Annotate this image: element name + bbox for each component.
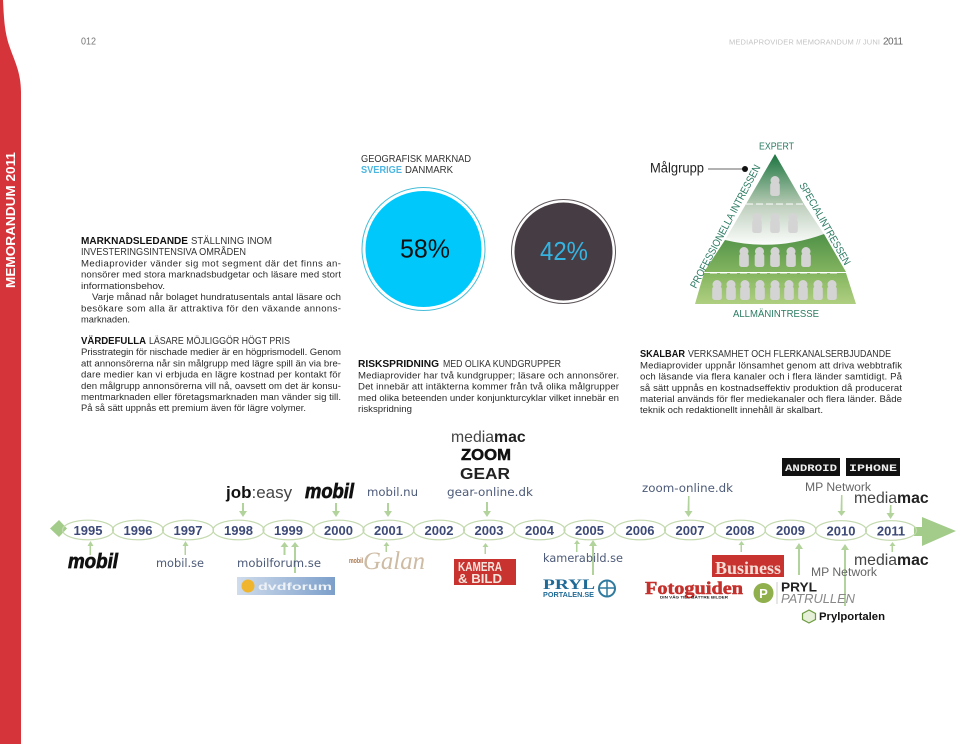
text block: värdefulla: VÄRDEFULLA [81, 334, 146, 347]
geographic market heading: DANMARK [405, 164, 453, 176]
year labels: 2007 [676, 523, 704, 538]
year labels: 1998 [224, 523, 253, 538]
text block: skalbar: material används för fler mediekanaler och flera länder. Både [640, 394, 902, 405]
year labels: 1996 [124, 523, 152, 538]
logo: mediamac top: mediamac [451, 429, 526, 446]
year labels: 2003 [475, 523, 503, 538]
circle: 58 percent Sverige: 58% [400, 234, 450, 264]
text block: marknadsledande: Varje månad når bolaget hundratusentals antal läsare och [92, 292, 341, 303]
text block: marknadsledande: informationsbehov. [81, 281, 165, 292]
logo: prylpatrullen: PRYL [781, 580, 817, 594]
logo: prylportalen.se: PORTALEN.SE [543, 590, 594, 599]
start diamond [50, 520, 67, 537]
text block: riskspridning: med olika beteenden under konjunkturcyklar vilket innebär en [358, 393, 619, 404]
text block: riskspridning: Mediaprovider har två kundgrupper; läsare och annonsörer. [358, 370, 619, 382]
logo: prylportalen.se: PRYL [543, 577, 595, 593]
pyramid chart: PROFESSIONELLA INTRESSEN [688, 163, 763, 290]
logo: kamera och bild: KAMERA [458, 560, 502, 574]
logo: mobil top: mobil [305, 481, 354, 503]
geographic market heading: SVERIGE [361, 164, 402, 176]
text block: marknadsledande: marknaden. [81, 314, 130, 326]
logo: prylportalen: Prylportalen [819, 611, 885, 623]
year labels: 1999 [274, 523, 303, 538]
label: mobilforum.se: mobilforum.se [237, 556, 321, 570]
target group label: Målgrupp [650, 160, 704, 176]
text block: riskspridning [358, 359, 620, 415]
text block: skalbar [640, 349, 903, 416]
logo: dvdforum [237, 577, 335, 595]
logo: prylpatrullen: P [759, 586, 768, 601]
page number: 012 [81, 36, 96, 48]
timeline arrows [88, 495, 896, 606]
text block: marknadsledande: Mediaprovider vänder sig mot segment där det finns an- [81, 258, 341, 270]
target group label [650, 160, 748, 176]
text block: marknadsledande [81, 235, 341, 326]
geographic market heading: GEOGRAFISK MARKNAD [361, 153, 471, 165]
label: kamerabild.se: kamerabild.se [543, 551, 623, 565]
running header: 2011 [883, 36, 903, 48]
timeline [50, 517, 956, 546]
logo: prylpatrullen [754, 580, 856, 606]
year labels: 2011 [877, 524, 905, 538]
running header: MEDIAPROVIDER MEMORANDUM // JUNI [729, 38, 880, 46]
text block: värdefulla: mentmarknaden eller företagsmarknaden man vänder sig till. [81, 392, 341, 403]
text block: riskspridning: Det innebär att intäkterna kommer från två olika målgrupper [358, 382, 620, 392]
text block: riskspridning: riskspridning [358, 404, 412, 415]
logo: iphone: IPHONE [849, 463, 897, 475]
text block: värdefulla: På så sätt uppnås ett premium även för lägre volymer. [81, 403, 306, 414]
year labels: 2004 [525, 523, 555, 538]
text block: skalbar: så sätt uppnås en kostnadseffektiv produktion då producerat [640, 383, 902, 394]
circle: 42 percent Danmark [512, 200, 616, 304]
text block: riskspridning: MED OLIKA KUNDGRUPPER [443, 359, 561, 370]
logo: mobil galan: mobil [349, 558, 363, 565]
logo: fotoguiden: Fotoguiden [645, 578, 743, 598]
pyramid chart [688, 140, 856, 320]
text block: marknadsledande: besökare som alla är attraktiva för den växande annons- [81, 304, 341, 314]
text block: marknadsledande: MARKNADSLEDANDE [81, 236, 188, 247]
text block: skalbar: teknik och redaktionellt innehåll är skalbart. [640, 405, 823, 416]
logo: mobil business: Business [715, 558, 781, 578]
logo: prylpatrullen: PATRULLEN [781, 591, 856, 606]
text block: marknadsledande: INVESTERINGSINTENSIVA OMRÅDEN [81, 245, 246, 258]
red side band [0, 0, 21, 744]
year labels: 2005 [575, 523, 604, 538]
pyramid chart: SPECIALINTRESSEN [796, 181, 853, 267]
label: mobil.nu: mobil.nu [367, 485, 418, 499]
label: gear-online.dk: gear-online.dk [447, 485, 533, 499]
year labels: 2006 [626, 523, 654, 538]
text block: värdefulla: LÄSARE MÖJLIGGÖR HÖGT PRIS [149, 335, 290, 347]
logo: kamera och bild: & BILD [458, 572, 502, 586]
end arrow [914, 517, 956, 546]
pyramid chart: EXPERT [759, 140, 794, 152]
year labels: 2008 [726, 523, 754, 538]
text block: skalbar: SKALBAR [640, 349, 686, 360]
year ovals [62, 520, 916, 540]
label: zoom-online.dk: zoom-online.dk [642, 481, 733, 495]
year labels: 1995 [74, 523, 102, 538]
logo: mobil bottom: mobil [68, 551, 118, 573]
logo: iphone [846, 458, 900, 476]
circle: 58 percent Sverige [362, 188, 485, 310]
year labels: 2009 [776, 523, 805, 538]
text block: marknadsledande: nonsörer med stora marknadsbudgetar och läsare med stort [81, 270, 341, 280]
label: MP Network bottom: MP Network [811, 567, 877, 579]
text block: skalbar: Mediaprovider uppnår lönsamhet genom att driva webbtrafik [640, 360, 902, 372]
logo: android [782, 458, 840, 476]
logo: mobil galan: Galan [363, 548, 425, 575]
text block: skalbar: VERKSAMHET OCH FLERKANALSERBJUDANDE [688, 349, 891, 360]
year labels: 1997 [174, 523, 202, 538]
label: MP Network top: MP Network [805, 482, 871, 494]
label: mobil.se: mobil.se [156, 556, 204, 570]
text block: värdefulla: Prisstrategin för nischade medier är en högprismodell. Genom [81, 347, 341, 358]
text block: skalbar: och läsande via flera kanaler och i flera länder samtidigt. På [640, 372, 903, 382]
text block: värdefulla: dare medier kan vi erbjuda en lägre kostnad per kontakt för [81, 370, 342, 380]
pyramid chart: ALLMÄNINTRESSE [733, 308, 819, 320]
text block: värdefulla: att annonsörerna når sin målgrupp med lägre spill än via bre- [81, 358, 341, 370]
logo: dvdforum: dvdforum [258, 582, 332, 593]
circle: 42 percent Danmark: 42% [540, 236, 588, 266]
year labels [74, 523, 905, 538]
year labels: 2002 [425, 523, 453, 538]
logo: android: ANDROID [785, 463, 837, 475]
text block: riskspridning: RISKSPRIDNING [358, 359, 439, 370]
red side band: MEMORANDUM 2011 [3, 152, 18, 288]
text block: värdefulla: den målgrupp annonsörerna vill nå, oavsett om det är konsu- [81, 381, 341, 392]
geographic market heading [361, 153, 471, 176]
logo: kamera och bild [454, 559, 516, 586]
logo: zoom: ZOOM [461, 447, 511, 464]
logo: mediamac right bottom: mediamac [854, 552, 929, 569]
logo: gear: GEAR [460, 466, 510, 483]
year labels: 2010 [827, 524, 855, 538]
logo: prylportalen.se [543, 577, 615, 599]
logo: job easy: job:easy [225, 483, 293, 502]
year labels: 2000 [324, 523, 353, 538]
year labels: 2001 [374, 523, 403, 538]
text block: värdefulla [81, 334, 342, 414]
logo: mediamac right top: mediamac [854, 490, 929, 507]
logo: fotoguiden: DIN VÄG TILL BÄTTRE BILDER [660, 596, 729, 600]
text block: marknadsledande: STÄLLNING INOM [191, 235, 272, 247]
